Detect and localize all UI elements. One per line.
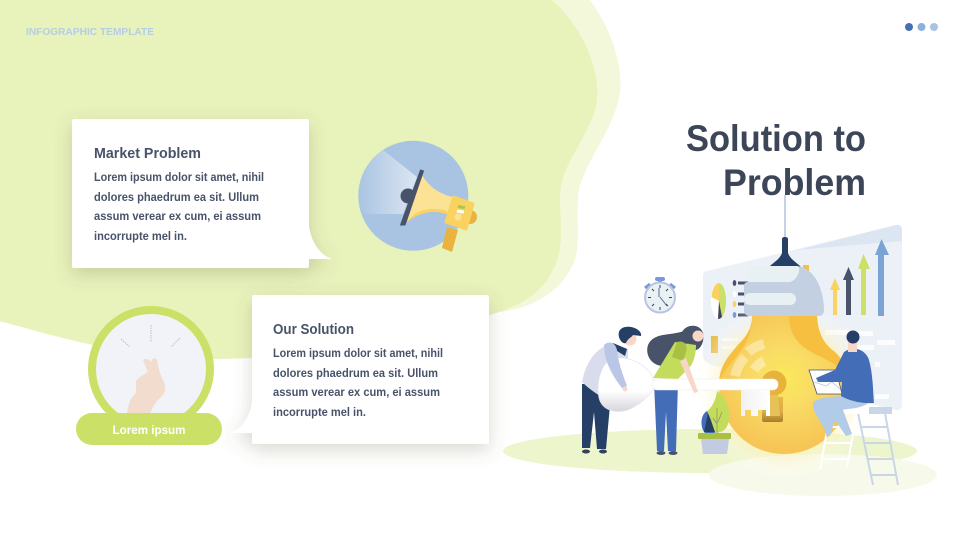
wire <box>784 195 786 241</box>
person: man body <box>582 327 641 454</box>
button <box>76 413 222 445</box>
text: our solution body: Lorem ipsum dolor sit amet, nihil <box>273 348 443 360</box>
text: market problem body: dolores phaedrum ea sit. Ullum <box>94 192 259 204</box>
title <box>686 118 866 203</box>
pie chart <box>711 283 726 319</box>
person: woman arm <box>680 358 698 393</box>
text: market problem body: incorrupte mel in. <box>94 231 187 243</box>
person: man arm <box>604 342 628 392</box>
keyhole <box>762 370 786 422</box>
text: market problem body <box>94 172 264 243</box>
pagination dots <box>905 23 938 31</box>
laptop <box>809 370 842 394</box>
lamp cap top <box>769 237 801 267</box>
icon: finger heart badge <box>76 306 222 445</box>
icon: megaphone <box>358 141 477 252</box>
icon: stopwatch <box>645 277 675 312</box>
leg <box>813 396 872 436</box>
lamp socket <box>744 266 824 316</box>
key <box>598 358 778 416</box>
text: market problem body: assum verear ex cum, ei assum <box>94 211 261 223</box>
torso <box>816 349 874 403</box>
person: woman body <box>647 326 704 455</box>
hand <box>127 358 165 414</box>
plant <box>698 391 731 454</box>
label: infographic template: INFOGRAPHIC TEMPLATE <box>26 26 154 38</box>
head <box>848 342 857 352</box>
sparkle lines <box>121 325 180 347</box>
yellow block <box>711 336 718 353</box>
title: Problem <box>723 162 866 203</box>
arrows chart <box>830 239 889 316</box>
text: market problem body: Lorem ipsum dolor sit amet, nihil <box>94 172 264 184</box>
ladder <box>820 413 857 470</box>
panel: market problem <box>72 119 332 268</box>
bulb highlights <box>735 344 764 376</box>
title: Solution to <box>686 118 866 159</box>
legend <box>733 280 748 318</box>
background blob: green <box>0 0 597 359</box>
person: seated worker with ladder <box>809 330 898 485</box>
light bulb <box>694 195 874 480</box>
panel: dashboard board <box>703 225 902 410</box>
table lines <box>722 330 895 399</box>
text: our solution body: assum verear ex cum, ei assum <box>273 387 440 399</box>
heading: our solution: Our Solution <box>273 322 354 338</box>
text: our solution body: dolores phaedrum ea sit. Ullum <box>273 368 438 380</box>
ground ellipses <box>503 429 937 496</box>
text: our solution body <box>273 348 443 419</box>
panel: our solution <box>229 295 489 444</box>
text: our solution body: incorrupte mel in. <box>273 407 366 419</box>
button label: Lorem ipsum <box>112 423 186 437</box>
key bit <box>741 390 770 416</box>
background blob: light green <box>0 0 620 322</box>
heading: market problem: Market Problem <box>94 146 201 162</box>
